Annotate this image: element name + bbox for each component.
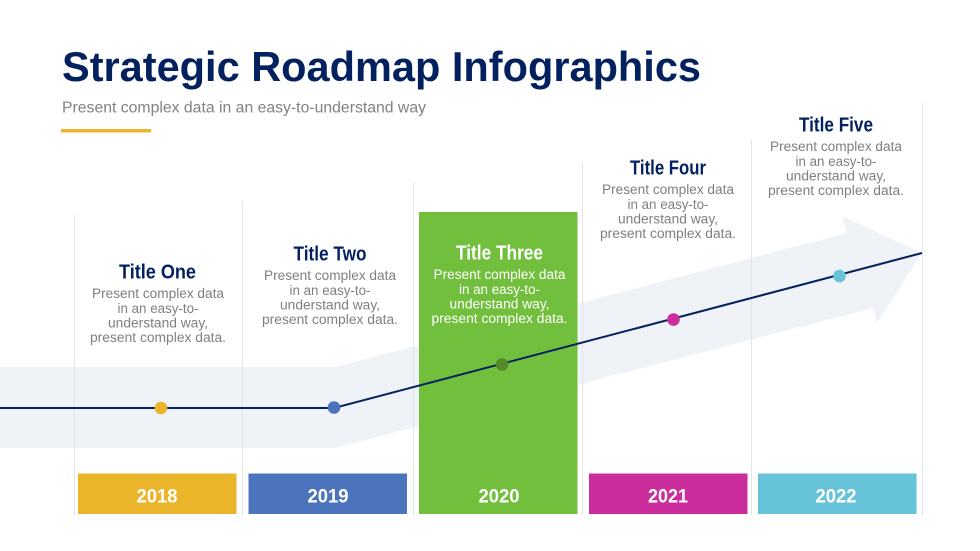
year label: 2020: 2020: [478, 486, 520, 508]
milestone dot: 2022: [833, 270, 846, 282]
text block: Title Three: understand way,: [450, 296, 550, 312]
text block: Title Five: [768, 115, 904, 198]
text block: Title One: Title One: [119, 262, 196, 284]
text block: Title Three: in an easy-to-: [459, 282, 540, 297]
text block: Title One: [90, 262, 226, 345]
year box: 2019: [248, 474, 407, 514]
milestone dot: 2019: [328, 401, 340, 414]
text block: Title Five: present complex data.: [768, 183, 904, 198]
text block: Title Four: [600, 158, 736, 241]
background arrow: [0, 216, 922, 448]
subtitle: Present complex data in an easy-to-understand way: [62, 100, 426, 116]
text block: Title Four: Present complex data: [602, 182, 735, 197]
text block: Title Four: present complex data.: [600, 226, 736, 241]
text block: Title One: present complex data.: [90, 330, 226, 345]
text block: Title Two: [262, 244, 398, 327]
text block: Title Four: in an easy-to-: [628, 197, 708, 212]
text block: Title Two: in an easy-to-: [290, 283, 370, 298]
year box: 2021: [589, 474, 748, 514]
highlighted column: 2020: [419, 212, 578, 514]
text block: Title Two: present complex data.: [262, 312, 398, 327]
text block: Title Three: Title Three: [456, 242, 543, 264]
title: Strategic Roadmap Infographics: [62, 43, 701, 90]
year box: 2019: 2019: [308, 486, 348, 508]
year box: 2018: 2018: [136, 486, 178, 508]
text block: Title Five: Present complex data: [770, 139, 903, 154]
text block: Title Two: Title Two: [294, 244, 366, 266]
text block: Title One: Present complex data: [92, 286, 225, 301]
year box: 2022: [758, 474, 916, 514]
text block: Title Three: present complex data.: [432, 311, 568, 326]
milestone dot: 2021: [667, 313, 680, 326]
text block: Title Four: Title Four: [630, 158, 706, 180]
text block: Title Two: understand way,: [280, 298, 380, 312]
text block: Title Five: in an easy-to-: [796, 154, 876, 169]
text block: Title One: in an easy-to-: [118, 301, 198, 316]
text block: Title Three: Present complex data: [434, 267, 566, 282]
text block: Title Five: understand way,: [786, 169, 886, 184]
year box: 2022: 2022: [816, 486, 856, 508]
text block: Title Four: understand way,: [618, 212, 718, 226]
year box: 2021: 2021: [648, 486, 688, 508]
roadmap line: [0, 253, 922, 408]
accent rule: [61, 129, 151, 132]
text block: Title Five: Title Five: [799, 115, 873, 137]
year box: 2018: [78, 474, 236, 514]
milestone dot: 2020: [496, 358, 508, 371]
text block: Title One: understand way,: [108, 316, 208, 330]
text block: Title Three: [432, 242, 568, 326]
text block: Title Two: Present complex data: [264, 268, 397, 283]
milestone dot: 2018: [155, 402, 167, 414]
